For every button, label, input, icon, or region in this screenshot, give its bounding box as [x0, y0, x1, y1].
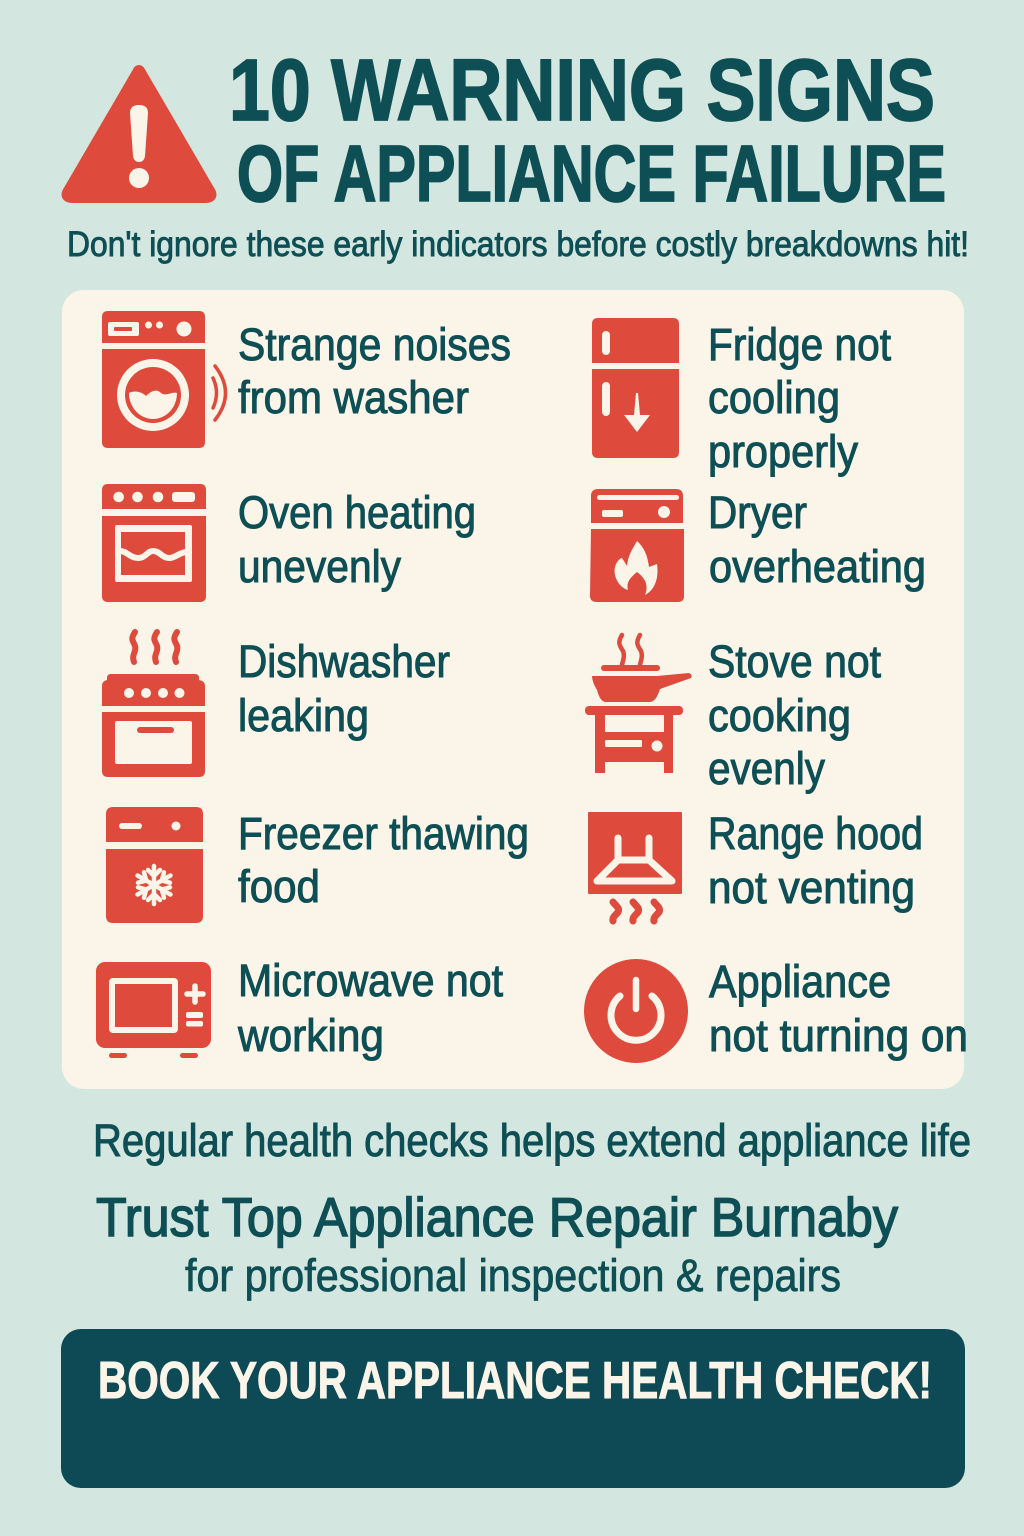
text: trust heading: Trust Top Appliance Repair Burnaby	[96, 1186, 898, 1248]
label	[708, 487, 926, 592]
label	[708, 319, 891, 477]
label	[238, 808, 529, 912]
label: Freezer thawing	[238, 808, 529, 859]
item: dishwasher	[102, 632, 450, 777]
button: call to action	[61, 1329, 965, 1488]
label	[238, 319, 511, 423]
text: professional inspection: for professional inspection & repairs	[185, 1250, 841, 1301]
label: Stove not	[708, 636, 881, 687]
item: oven	[102, 484, 476, 602]
label: not turning on	[709, 1010, 968, 1061]
icon: microwave	[96, 962, 211, 1058]
label	[238, 636, 450, 741]
label	[238, 487, 476, 592]
label	[237, 955, 503, 1061]
icon: freezer	[106, 807, 203, 923]
label: cooking	[708, 690, 851, 741]
label: Range hood	[708, 808, 923, 859]
label	[708, 808, 923, 913]
icon: washing machine	[102, 311, 226, 448]
label	[708, 636, 881, 794]
label: not venting	[708, 862, 915, 913]
icon: dishwasher with steam	[102, 632, 205, 777]
label: Oven heating	[238, 487, 476, 538]
item: power	[584, 956, 968, 1063]
label: leaking	[238, 690, 369, 741]
label: food	[238, 861, 320, 912]
item: stove	[585, 635, 881, 794]
icon: range hood	[588, 812, 682, 921]
icon: power button	[584, 959, 688, 1063]
label: Dryer	[708, 487, 807, 538]
item: dryer	[590, 487, 926, 602]
icon: stove with pan	[585, 635, 692, 773]
icon: fridge	[592, 318, 679, 458]
label: from washer	[238, 372, 469, 423]
label: unevenly	[238, 541, 401, 592]
label: working	[237, 1010, 384, 1061]
label	[709, 956, 968, 1061]
label: Appliance	[709, 956, 891, 1007]
label: evenly	[708, 743, 825, 794]
item: washer	[102, 311, 511, 448]
label: Microwave not	[238, 955, 503, 1006]
label: Fridge not	[708, 319, 891, 370]
item: range hood	[588, 808, 923, 921]
item: freezer	[106, 807, 529, 923]
item: fridge	[592, 318, 891, 477]
label: overheating	[709, 541, 926, 592]
label: properly	[708, 426, 858, 477]
panel: warning signs list	[62, 290, 968, 1089]
label: Dishwasher	[238, 636, 450, 687]
item: microwave	[96, 955, 503, 1061]
label: cooling	[708, 372, 840, 423]
icon: warning triangle	[68, 71, 210, 197]
label: Strange noises	[238, 319, 511, 370]
icon: oven	[102, 484, 206, 602]
icon: dryer	[590, 489, 684, 602]
title	[229, 42, 946, 218]
